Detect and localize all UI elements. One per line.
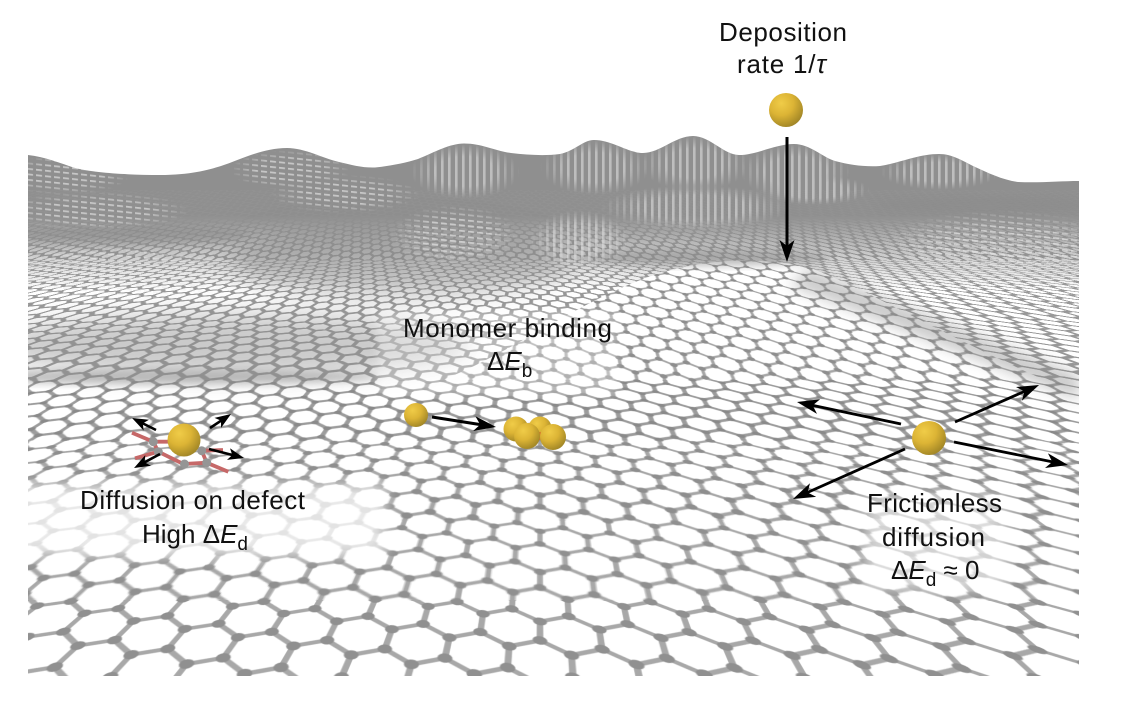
label: deposition rate [719, 17, 847, 79]
far surface base tone [28, 136, 1079, 284]
near mesh rows 2 [28, 440, 1079, 520]
label: frictionless diffusion [867, 488, 1002, 591]
label: frictionless diffusion: ΔE [891, 555, 926, 585]
label: monomer binding: ΔE [487, 346, 522, 376]
surface shading and ripples [28, 138, 1079, 402]
gold monomer [404, 403, 428, 427]
label haze: diffusion on defect [28, 476, 394, 564]
defect carbon atoms [149, 437, 211, 468]
label haze: frictionless diffusion [858, 488, 1012, 598]
label: diffusion on defect: d [237, 534, 248, 555]
gold cluster [504, 416, 566, 450]
arrows: frictionless diffusion [802, 389, 1058, 495]
near mesh rows 4 [28, 600, 1079, 676]
label: deposition rate: Deposition [719, 17, 847, 47]
label: frictionless diffusion: ≈ 0 [936, 555, 979, 585]
arrow: deposition [786, 137, 788, 252]
label: diffusion on defect: High ΔE [142, 519, 237, 549]
gold atom: frictionless diffusion [912, 421, 946, 455]
label: frictionless diffusion: d [926, 570, 936, 591]
label: monomer binding: b [522, 361, 532, 382]
near mesh rows 1 [28, 380, 1079, 440]
gold atom on defect [168, 424, 200, 456]
near mesh rows 3 [28, 520, 1079, 601]
label: monomer binding [403, 313, 612, 382]
label: diffusion on defect: Diffusion on defect [80, 485, 306, 515]
label: deposition rate: rate 1/τ [737, 49, 828, 79]
mid-distance mesh rows [28, 260, 1079, 320]
arrows: diffusion on defect [138, 418, 237, 465]
label: monomer binding: Monomer binding [403, 313, 612, 343]
defect region: red bonds, atoms and gold atom [132, 424, 228, 472]
graphene sheet [28, 136, 1079, 676]
label haze: monomer binding [374, 308, 620, 398]
label: frictionless diffusion: Frictionless [867, 488, 1002, 518]
central dome of the sheet [444, 260, 1036, 380]
arrow: monomer to cluster [432, 417, 486, 426]
deposited gold atom [769, 93, 803, 127]
label: diffusion on defect [80, 485, 306, 555]
label: frictionless diffusion: diffusion [882, 522, 985, 552]
middle mesh rows [28, 320, 1079, 380]
distant mesh rows [28, 223, 1079, 260]
red defect bonds [132, 433, 228, 472]
